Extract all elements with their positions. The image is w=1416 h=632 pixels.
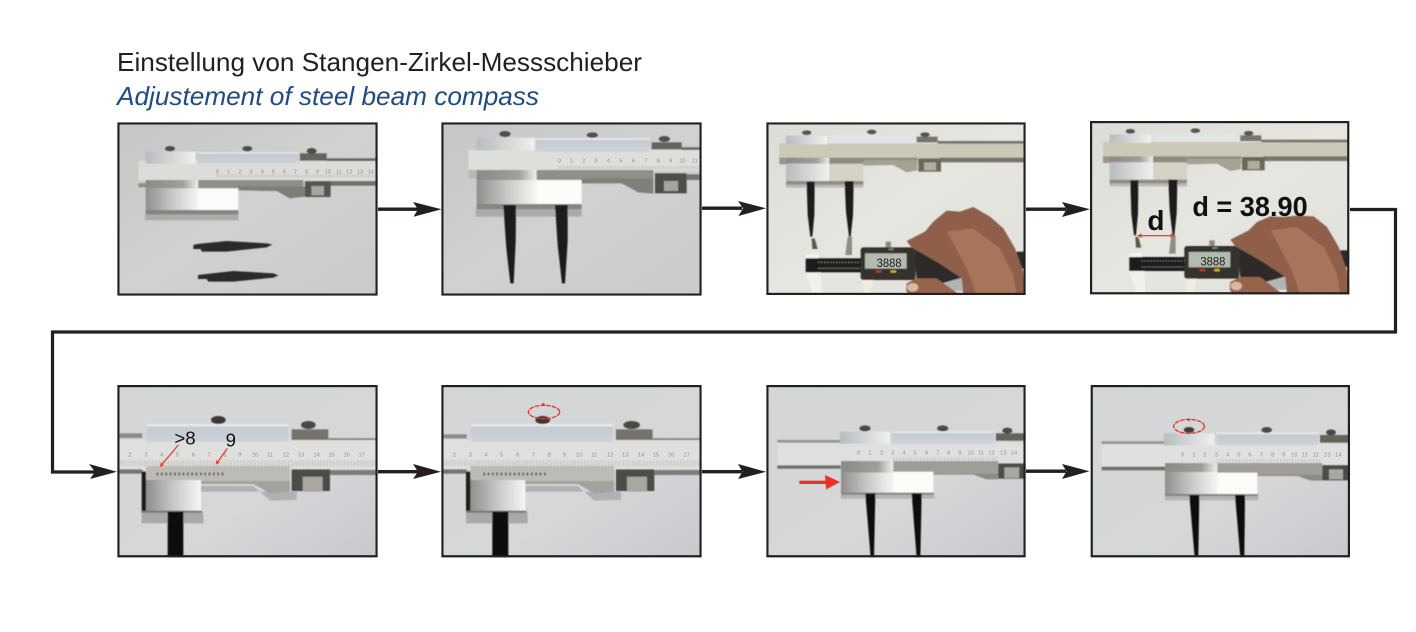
- ruler numbers: 9: [958, 450, 962, 456]
- ruler numbers: 3: [144, 453, 148, 459]
- ruler numbers: 13: [357, 169, 363, 175]
- ruler numbers: 8: [548, 453, 551, 459]
- label 9: 9: [226, 430, 236, 451]
- ruler numbers: 6: [192, 453, 195, 459]
- ruler numbers: 10: [325, 169, 331, 175]
- ruler numbers: 16: [668, 453, 674, 459]
- ruler numbers: 6: [632, 159, 635, 165]
- ruler numbers: 14: [1335, 452, 1341, 458]
- ruler numbers: 12: [1313, 452, 1319, 458]
- ruler numbers: 3: [469, 453, 472, 459]
- ruler numbers: 10: [576, 453, 582, 459]
- ruler numbers: 8: [657, 159, 660, 165]
- ruler numbers: 4: [607, 159, 610, 165]
- ruler numbers: [453, 452, 690, 456]
- ruler numbers: [558, 158, 698, 162]
- ruler numbers: 2: [128, 453, 132, 459]
- ruler numbers: 13: [298, 453, 304, 459]
- ruler numbers: [216, 170, 374, 174]
- ruler numbers: 5: [619, 159, 623, 165]
- LCD reading: 3888: [877, 256, 902, 270]
- ruler numbers: 6: [283, 169, 286, 175]
- ruler numbers: 12: [346, 169, 352, 175]
- ruler numbers: 6: [1248, 452, 1252, 458]
- panel: step 3 measuring with digital caliper: [766, 122, 1026, 295]
- ruler numbers: 14: [368, 169, 374, 175]
- ruler numbers: 9: [238, 453, 242, 459]
- label d value: d = 38.90: [1192, 191, 1308, 222]
- ruler numbers: 11: [692, 159, 698, 165]
- ruler numbers: 13: [1324, 452, 1330, 458]
- ruler numbers: 15: [653, 453, 659, 459]
- ruler numbers: 2: [453, 453, 456, 459]
- ruler numbers: 7: [644, 159, 648, 165]
- ruler numbers: 4: [484, 453, 488, 459]
- ruler numbers: 6: [925, 450, 928, 456]
- LCD reading: 3888: [1200, 255, 1226, 269]
- ruler numbers: 5: [272, 169, 275, 175]
- panel: step 7 push jaw: [766, 385, 1026, 557]
- ruler numbers: 15: [329, 453, 335, 459]
- ruler numbers: 7: [207, 453, 211, 459]
- ruler numbers: 2: [1203, 452, 1207, 458]
- ruler numbers: 8: [1271, 452, 1274, 458]
- ruler numbers: 11: [336, 169, 342, 175]
- ruler numbers: 7: [294, 169, 297, 175]
- ruler numbers: 1: [570, 159, 573, 165]
- ruler numbers: 13: [1000, 450, 1006, 456]
- ruler numbers: 0: [857, 450, 860, 456]
- ruler numbers: 8: [947, 450, 950, 456]
- ruler numbers: 17: [359, 453, 365, 459]
- red rotation mark: [528, 403, 560, 419]
- ruler numbers: 7: [1260, 452, 1263, 458]
- ruler numbers: 5: [500, 453, 503, 459]
- ruler numbers: 12: [283, 453, 289, 459]
- red push arrow: [799, 475, 840, 489]
- ruler numbers: 4: [1226, 452, 1229, 458]
- subtitle: English heading: Adjustement of steel beam compass: [115, 81, 539, 111]
- ruler numbers: 5: [176, 453, 179, 459]
- ruler numbers: 11: [267, 453, 273, 459]
- ruler numbers: 12: [607, 453, 613, 459]
- panel: step 8 tighten top screw: [1091, 385, 1350, 557]
- ruler numbers: 8: [305, 169, 308, 175]
- panel: step 6 loosen top screw: [441, 385, 702, 557]
- ruler numbers: 0: [1181, 452, 1184, 458]
- red rotation mark: [1174, 418, 1204, 433]
- ruler numbers: 16: [344, 453, 350, 459]
- ruler numbers: 6: [516, 453, 519, 459]
- ruler numbers: 8: [223, 453, 227, 459]
- ruler numbers: 10: [252, 453, 258, 459]
- ruler numbers: 9: [1282, 452, 1285, 458]
- ruler numbers: 7: [532, 453, 535, 459]
- panel: step 1 parts laid out: [117, 122, 378, 296]
- ruler numbers: 3: [249, 169, 253, 175]
- ruler numbers: 13: [622, 453, 628, 459]
- ruler numbers: 9: [669, 159, 672, 165]
- ruler numbers: 2: [238, 169, 242, 175]
- ruler numbers: 12: [989, 450, 995, 456]
- red reading arrows: [160, 445, 227, 467]
- ruler numbers: 10: [1291, 452, 1297, 458]
- panel: step 4 distance d read out: [1090, 121, 1349, 295]
- ruler numbers: 9: [316, 169, 319, 175]
- ruler numbers: 3: [1215, 452, 1218, 458]
- ruler numbers: 9: [563, 453, 566, 459]
- ruler numbers: 14: [638, 453, 644, 459]
- ruler numbers: 11: [978, 450, 984, 456]
- ruler numbers: [857, 450, 1017, 454]
- ruler numbers: 1: [868, 450, 872, 456]
- panel: step 5 reading vernier: [117, 385, 378, 557]
- ruler numbers: 5: [913, 450, 917, 456]
- ruler numbers: 4: [902, 450, 906, 456]
- red dimension arrow: [1137, 233, 1175, 238]
- ruler numbers: 7: [936, 450, 939, 456]
- ruler numbers: 3: [891, 450, 894, 456]
- ruler numbers: 10: [968, 450, 974, 456]
- ruler numbers: 17: [684, 453, 690, 459]
- ruler numbers: 3: [594, 159, 598, 165]
- ruler numbers: 2: [880, 450, 883, 456]
- ruler numbers: [1181, 452, 1342, 456]
- ruler numbers: 14: [314, 453, 320, 459]
- ruler numbers: 2: [582, 159, 585, 165]
- label greater than 8: >8: [174, 428, 196, 449]
- ruler numbers: 11: [591, 453, 597, 459]
- ruler numbers: [128, 452, 364, 456]
- ruler numbers: 10: [680, 159, 686, 165]
- ruler numbers: 14: [1011, 450, 1017, 456]
- ruler numbers: 0: [216, 169, 219, 175]
- ruler numbers: 1: [227, 169, 230, 175]
- ruler numbers: 5: [1237, 452, 1241, 458]
- flow arrows and connector: [52, 201, 1396, 479]
- ruler numbers: 4: [160, 453, 163, 459]
- label d: d: [1147, 205, 1164, 236]
- title: German heading: Einstellung von Stangen-Zirkel-Messschieber: [117, 47, 642, 77]
- ruler numbers: 4: [261, 169, 264, 175]
- panel: step 2 points mounted: [441, 122, 702, 296]
- ruler numbers: 1: [1192, 452, 1196, 458]
- ruler numbers: 0: [558, 159, 561, 165]
- ruler numbers: 11: [1302, 452, 1308, 458]
